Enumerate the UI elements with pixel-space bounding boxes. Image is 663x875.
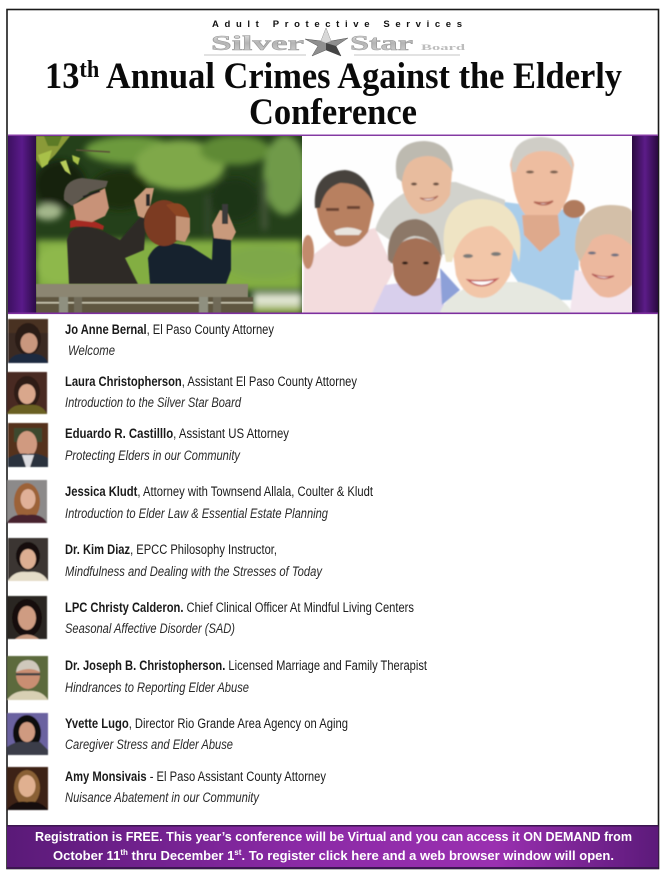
footer registration banner: th [120,848,128,857]
logo: Silver Star Board: Silver [211,31,304,55]
speaker: Eduardo R. Castilllo [8,423,289,467]
header [45,19,622,133]
speaker: Yvette Lugo [7,713,348,755]
headshot [7,480,47,523]
organisation line: Adult Protective Services [212,19,462,30]
photo: group of six smiling seniors [302,136,632,313]
foliage and grass [34,135,307,314]
speaker: Laura Christopherson: Laura Christopherson, Assistant El Paso County Attorney [65,374,357,389]
speaker: Yvette Lugo: Caregiver Stress and Elder Abuse [65,737,233,752]
headshot [7,767,48,810]
speaker: Laura Christopherson [7,372,357,414]
logo: Silver Star Board [204,28,466,56]
logo: Silver Star Board: Board [421,42,466,52]
logo: Silver Star Board: Star [350,31,413,55]
speaker: Jessica Kludt: Introduction to Elder Law & Essential Estate Planning [65,506,328,521]
speaker: Jessica Kludt [7,480,373,523]
headshot [7,713,48,755]
speaker: LPC Christy Calderon: LPC Christy Calderon. Chief Clinical Officer At Mindful Living Centers [65,600,414,615]
speaker: Amy Monsivais [7,767,326,810]
title [45,56,622,133]
speaker: Dr. Kim Diaz [8,538,323,581]
footer registration banner: thru December 1 [128,848,234,863]
footer registration banner: st [234,848,242,857]
back man left [375,182,505,260]
speaker: Amy Monsivais: Amy Monsivais - El Paso Assistant County Attorney [65,769,326,784]
speaker: Dr. Joseph B. Christopherson [7,656,427,700]
photo banner [8,134,658,314]
footer registration banner [7,825,658,869]
speaker: Eduardo R. Castilllo: Protecting Elders in our Community [65,448,241,463]
bench [36,284,253,313]
speaker: Dr. Joseph B. Christopherson: Dr. Joseph B. Christopherson. Licensed Marriage and Family Therapist [65,658,427,673]
title: Conference [249,92,417,133]
speaker: LPC Christy Calderon [7,596,414,639]
speaker: Jo Anne Bernal: Jo Anne Bernal, El Paso County Attorney [65,322,274,337]
title: Annual Crimes Against the Elderly [99,56,622,97]
speaker: Dr. Joseph B. Christopherson: Hindrances to Reporting Elder Abuse [65,680,249,695]
small woman [372,278,445,313]
speaker: Dr. Kim Diaz: Mindfulness and Dealing with the Stresses of Today [65,564,323,579]
right woman [570,270,632,313]
back man right [500,202,580,300]
headshot [7,596,47,639]
speaker: LPC Christy Calderon: Seasonal Affective Disorder (SAD) [65,621,235,636]
speaker: Jo Anne Bernal [8,319,274,363]
headshot [8,423,48,467]
footer registration banner: Registration is FREE. This year’s conference will be Virtual and you can access it ON DEMAND from [35,829,632,844]
speaker: Jo Anne Bernal: Welcome [68,343,115,358]
left man [303,228,394,313]
title: 13 [45,56,82,97]
speaker: Laura Christopherson: Introduction to the Silver Star Board [65,395,241,410]
headshot [7,372,47,414]
speaker: Eduardo R. Castilllo: Eduardo R. Castilllo, Assistant US Attorney [65,426,289,441]
speaker: Jessica Kludt: Jessica Kludt, Attorney with Townsend Allala, Coulter & Kludt [65,484,373,499]
photo: couple on a bench in a park [34,135,307,314]
headshot [7,656,48,700]
title: th [79,57,99,83]
man [64,178,154,284]
speaker: Yvette Lugo: Yvette Lugo, Director Rio Grande Area Agency on Aging [65,716,348,731]
leaves [36,136,110,175]
speaker: Dr. Kim Diaz: Dr. Kim Diaz, EPCC Philosophy Instructor, [65,542,277,557]
footer registration banner: . To register click here and a web browser window will open. [241,848,614,863]
woman [144,200,236,284]
headshot [8,319,48,363]
footer registration banner: October 11 [53,848,120,863]
headshot [8,538,48,581]
speaker: Amy Monsivais: Nuisance Abatement in our Community [65,790,260,805]
centre woman [440,282,572,313]
